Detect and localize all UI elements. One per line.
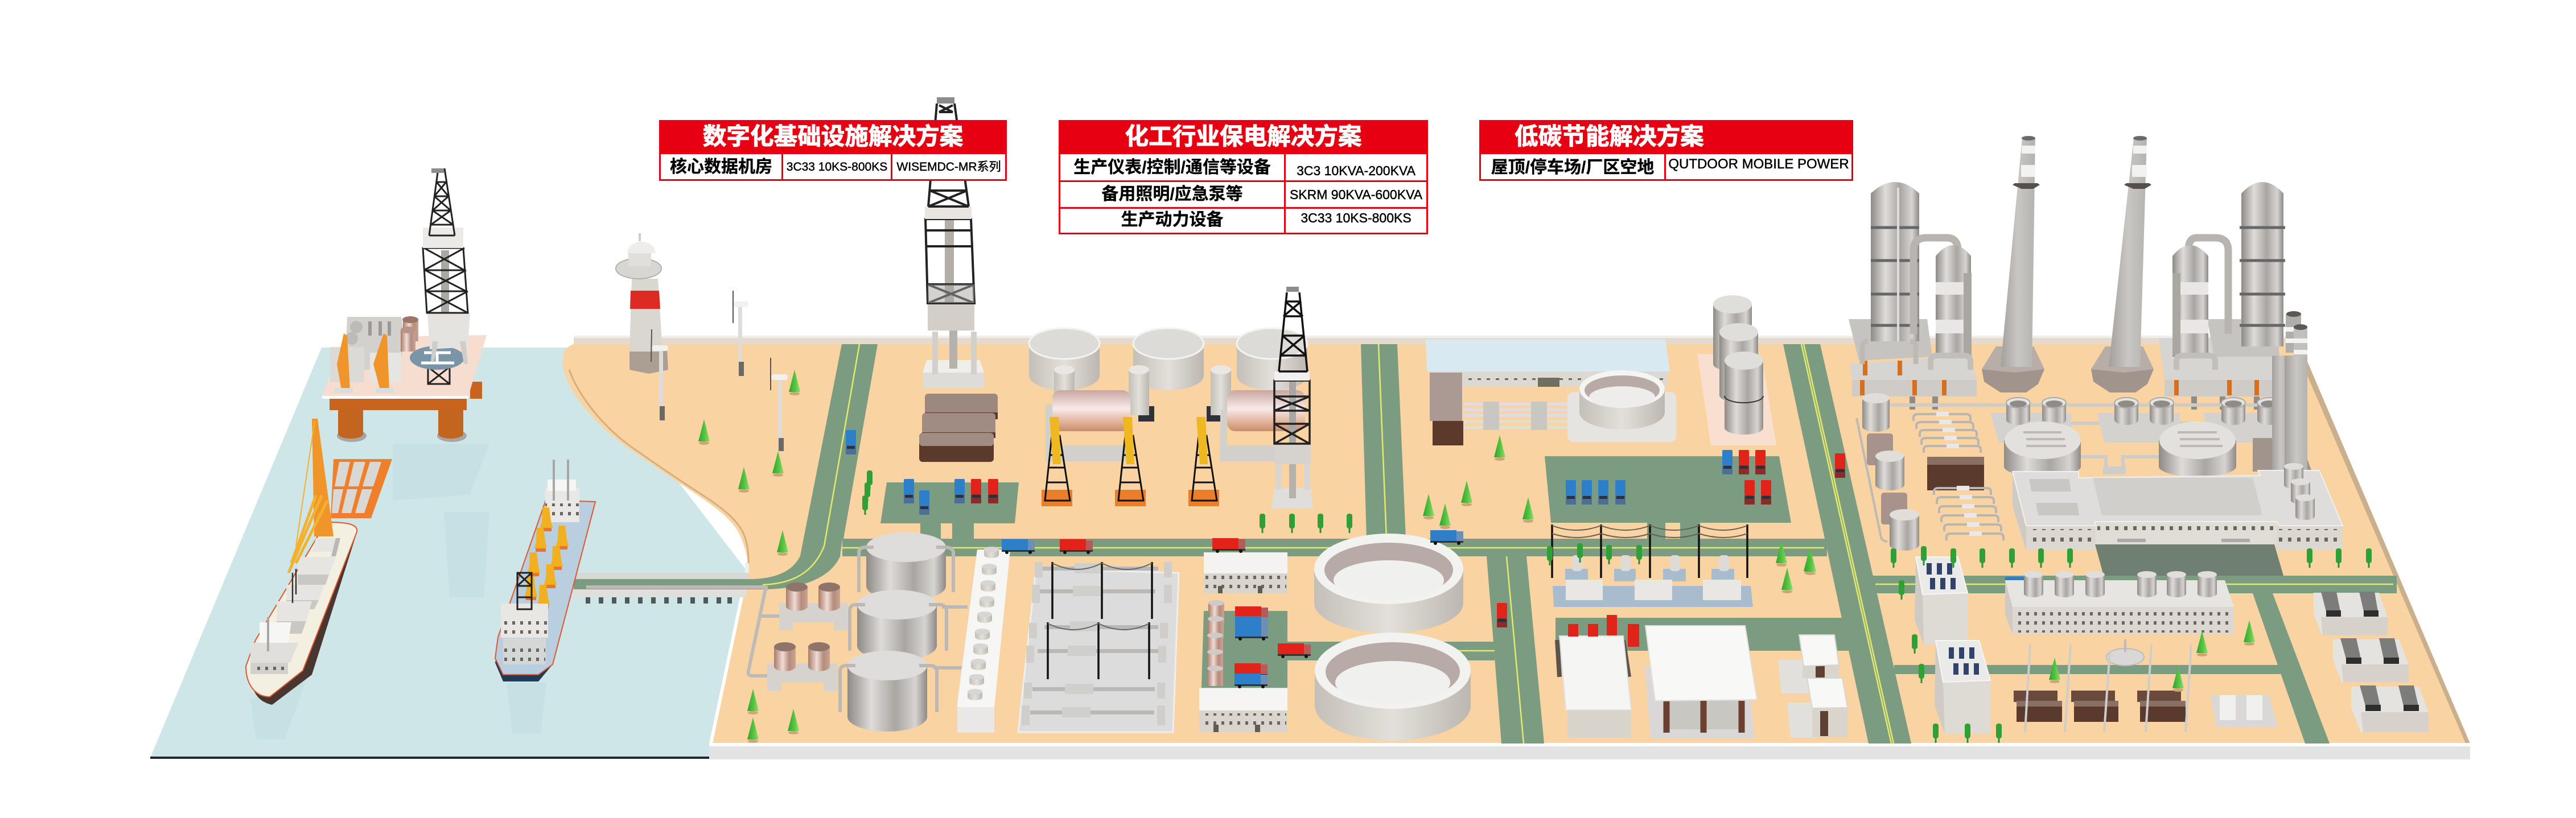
poles and wires	[1048, 562, 1152, 679]
superstructure	[250, 538, 340, 674]
modules	[330, 317, 405, 382]
brown box	[1927, 457, 1984, 490]
short column	[1936, 245, 1972, 357]
row divider	[1060, 207, 1426, 209]
heading	[1479, 120, 1853, 154]
substation pad	[1018, 562, 1179, 732]
main pipe rack	[1890, 405, 2274, 423]
row label: 核心数据机房	[670, 158, 772, 176]
crane ship	[246, 419, 392, 705]
truck yard tanks	[1207, 600, 1224, 686]
land plate	[563, 336, 2470, 759]
pressure vessels	[1046, 365, 1305, 461]
hull	[253, 529, 357, 705]
column divider	[1664, 154, 1666, 181]
side stacks	[2253, 311, 2312, 472]
road centre lines	[763, 344, 2393, 743]
brown container pairs	[2014, 691, 2186, 722]
row label: 生产仪表/控制/通信等设备	[1073, 158, 1271, 177]
table: low carbon	[1479, 120, 1853, 181]
upper coils	[1914, 412, 1981, 453]
offshore platform	[322, 168, 487, 442]
plinths	[1990, 413, 2272, 443]
row label: 备用照明/应急泵等	[1101, 185, 1243, 204]
main derrick	[923, 97, 984, 388]
heading: 低碳节能解决方案	[1515, 123, 1704, 150]
column divider	[781, 154, 783, 181]
silver tank and coil group	[1857, 393, 2003, 551]
model: 3C33 10KS-800KS	[787, 160, 887, 173]
small houses	[1778, 635, 1839, 693]
round pond	[1567, 370, 1676, 442]
short cypress trees	[862, 470, 2372, 743]
lower derrick tower	[423, 168, 470, 364]
brown containers	[919, 394, 998, 462]
rooftop panel boxes	[2314, 592, 2429, 732]
solar buildings	[1915, 557, 1990, 734]
chimney 2	[2091, 136, 2154, 393]
second derrick	[1271, 287, 1313, 509]
trucks	[846, 430, 1845, 688]
water reflections	[250, 444, 546, 739]
lighthouse	[616, 233, 668, 374]
distillation cluster left	[1849, 182, 1977, 410]
row label: 生产动力设备	[1121, 210, 1224, 229]
chimney 1	[1982, 136, 2044, 393]
road network	[574, 344, 2397, 743]
open vessels	[2006, 398, 2281, 425]
model: WISEMDC-MR系列	[896, 160, 1001, 173]
long office	[2005, 571, 2234, 634]
air conditioning units	[2211, 695, 2278, 727]
overhead power line	[1552, 524, 1747, 578]
model: 3C33 10KS-800KS	[1301, 210, 1412, 225]
row divider	[1060, 180, 1426, 182]
fuel canopy	[1645, 626, 1757, 738]
silver storage tanks	[840, 532, 968, 732]
white buildings	[1557, 626, 1847, 738]
main factory	[2013, 463, 2343, 551]
column divider	[891, 154, 892, 181]
heading: 数字化基础设施解决方案	[703, 123, 963, 150]
copper tanks on plinths	[767, 582, 847, 691]
pump jack 1	[1042, 417, 1072, 506]
crane	[289, 419, 334, 603]
tanker ship	[495, 460, 595, 681]
gas storage on pink pad	[1697, 295, 1776, 445]
street lights	[2025, 645, 2191, 732]
conifer trees	[698, 370, 2255, 743]
fore superstructure	[501, 604, 548, 664]
model: QUTDOOR MOBILE POWER	[1668, 156, 1849, 172]
ship derrick	[517, 573, 532, 609]
column divider	[1284, 154, 1286, 234]
pipe bundle	[1463, 402, 1569, 430]
pipe arch	[1914, 238, 1958, 334]
table: chemical power protection	[1059, 120, 1428, 234]
pump jack 3	[1188, 417, 1219, 506]
heading	[659, 120, 1007, 154]
table: digital infrastructure	[659, 120, 1007, 181]
turbine 2	[732, 291, 748, 376]
process units	[1990, 398, 2281, 477]
distillation cluster right	[2159, 182, 2285, 410]
model: SKRM 90KVA-600KVA	[1290, 187, 1422, 202]
decks	[1850, 355, 1977, 380]
pier	[574, 573, 780, 676]
helideck	[410, 346, 464, 384]
fountain	[2106, 639, 2144, 666]
turbine 3	[771, 358, 788, 451]
model: 3C3 10KVA-200KVA	[1297, 163, 1415, 178]
roof tanks	[2284, 463, 2315, 520]
water basin	[150, 348, 748, 759]
row label: 屋顶/停车场/厂区空地	[1491, 158, 1654, 177]
clarifier ponds	[1314, 534, 1471, 741]
turbine 1	[651, 329, 668, 420]
pump jacks	[1042, 417, 1219, 506]
wind turbines	[651, 291, 788, 451]
deck	[246, 522, 357, 697]
pipe manifold	[957, 547, 1010, 733]
heading: 化工行业保电解决方案	[1125, 123, 1361, 150]
busbars	[1026, 562, 1168, 725]
cargo pad	[331, 459, 392, 518]
deck	[322, 335, 487, 396]
warehouse	[1426, 340, 1676, 445]
tall column	[1871, 182, 1919, 341]
crude tanks	[1029, 328, 1307, 390]
heading	[1059, 120, 1428, 154]
pump jack 2	[1115, 417, 1146, 506]
copper tanks	[401, 316, 418, 352]
back leg	[470, 382, 482, 399]
transformer platform	[1553, 555, 1753, 607]
depot building	[1557, 636, 1631, 738]
chimneys	[1982, 136, 2154, 393]
orange cranes	[335, 333, 394, 393]
large reactors	[2004, 422, 2081, 477]
lower coils	[1934, 486, 2003, 540]
aft superstructure	[545, 460, 579, 522]
yellow pumps	[525, 507, 569, 609]
legs	[337, 410, 467, 442]
office buildings	[1199, 552, 1287, 732]
